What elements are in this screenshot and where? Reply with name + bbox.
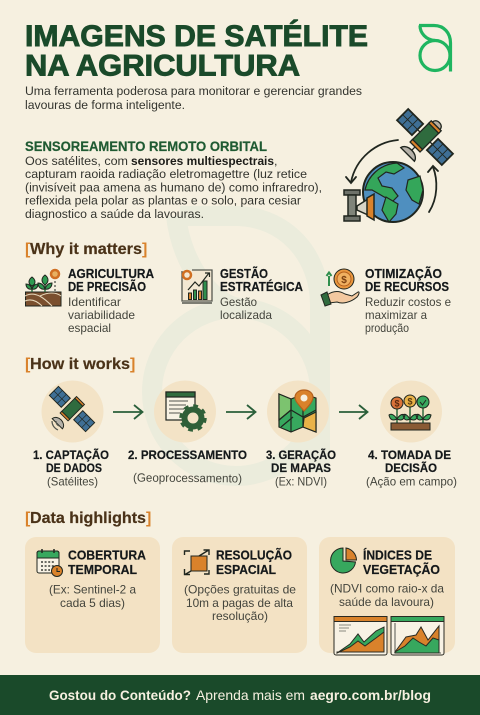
description: Identificar [68, 295, 121, 309]
label: (Satélites) [47, 474, 98, 488]
section heading: why it matters: [ [25, 241, 31, 258]
description: produção [365, 321, 409, 335]
label: 2. PROCESSAMENTO [128, 448, 247, 462]
description [330, 582, 444, 609]
description: (NDVI como raio-x da [330, 582, 444, 596]
subtitle: lavouras de forma inteligente. [25, 98, 185, 112]
step 2: processamento [128, 380, 247, 485]
icon: chart and gear [182, 270, 212, 303]
label: (Ação em campo) [366, 474, 457, 488]
icon: money plants: $ [407, 396, 413, 406]
footer: Aprenda mais em [196, 687, 305, 703]
heading: AGRICULTURA [68, 266, 155, 281]
satellite [385, 100, 462, 177]
section heading: how it works: ] [130, 356, 135, 373]
label [128, 448, 247, 485]
heading [365, 266, 449, 294]
icon: money plants: $ [394, 398, 400, 408]
text block: sensoreamento: diagnostico a saúde da lavouras. [25, 207, 204, 221]
label: (Geoprocessamento) [133, 471, 242, 485]
label: DE MAPAS [271, 461, 331, 475]
icon: plants and soil [25, 270, 61, 306]
title: NA AGRICULTURA [25, 50, 300, 82]
watermark logo [152, 216, 320, 476]
arrow 2 [226, 405, 256, 419]
heading: COBERTURA [68, 548, 147, 562]
heading: OTIMIZAÇÃO [365, 266, 442, 281]
heading: GESTÃO [220, 266, 268, 281]
section heading: why it matters: ] [142, 241, 147, 258]
description [49, 582, 136, 610]
description: Reduzir costos e [365, 295, 451, 309]
panel: cobertura temporal [25, 537, 160, 653]
orbit arrows [346, 140, 438, 212]
icon: money plants [380, 380, 442, 442]
section heading: how it works: [ [25, 356, 31, 373]
description [68, 295, 135, 335]
text block: sensoreamento: Oos satélites, com [25, 154, 128, 168]
label: DE DADOS [46, 461, 102, 475]
description: 10m a pagas de alta [186, 596, 293, 610]
section heading: data highlights: ] [146, 510, 151, 527]
description: variabilidade [68, 308, 135, 322]
label: 4. TOMADA DE [368, 448, 451, 462]
section heading: how it works: How it works [30, 356, 130, 373]
heading [220, 266, 304, 294]
description: cada 5 dias) [60, 596, 125, 610]
step 4: tomada de decisão [366, 380, 457, 488]
subtitle: Uma ferramenta poderosa para monitorar e gerenciar grandes [25, 84, 362, 98]
item: gestão estratégica [182, 266, 304, 322]
description: resolução) [212, 609, 268, 623]
panel: resolução espacial [172, 537, 307, 653]
item: otimização de recursos [321, 266, 451, 335]
description: (Ex: Sentinel-2 a [49, 582, 136, 596]
icon: map with pin [267, 380, 329, 442]
icon: resize [184, 550, 209, 574]
title [25, 19, 368, 82]
subtitle [25, 84, 362, 112]
section heading: why it matters: Why it matters [30, 241, 142, 258]
description [184, 582, 296, 623]
panel: índices de vegetação [319, 537, 455, 655]
heading [363, 548, 440, 577]
ground station [344, 190, 374, 221]
heading: VEGETAÇÃO [363, 562, 440, 577]
label: 3. GERAÇÃO [266, 447, 336, 462]
chart: orange window [334, 616, 387, 655]
footer: Gostou do Conteúdo? [49, 687, 191, 703]
heading: ÍNDICES DE [363, 548, 432, 562]
label: (Ex: NDVI) [275, 474, 327, 488]
label: DECISÃO [385, 460, 437, 475]
step 1: captação de dados [33, 380, 109, 488]
icon: window and gear [154, 380, 216, 442]
heading: ESPACIAL [216, 562, 276, 577]
description: localizada [220, 308, 272, 322]
icon: satellite [39, 380, 104, 442]
heading: RESOLUÇÃO [216, 548, 292, 562]
text block: sensoreamento: (invisíveit paa amena as humano de) como infraredro), [25, 180, 322, 194]
arrow 3 [339, 405, 368, 419]
heading [216, 548, 292, 577]
label [366, 448, 457, 488]
section heading: data highlights: [ [25, 510, 31, 527]
footer [0, 675, 480, 715]
text block: sensoreamento: capturam raoida radiação eletromagettre (luz retice [25, 167, 307, 181]
heading: TEMPORAL [68, 562, 137, 577]
item: agricultura de precisão [25, 266, 155, 335]
text block: sensoreamento: sensores multiespectrais [131, 154, 274, 168]
label: 1. CAPTAÇÃO [33, 447, 109, 462]
title: IMAGENS DE SATÉLITE [25, 19, 368, 53]
heading: DE PRECISÃO [68, 279, 146, 294]
icon: calendar and clock [37, 549, 62, 576]
description [220, 295, 272, 322]
description: (Opções gratuitas de [184, 582, 296, 596]
label [33, 447, 109, 488]
chart: green window [391, 616, 444, 655]
icon: pie chart [331, 548, 356, 573]
icon: hand with coin: $ [341, 275, 347, 286]
label [266, 447, 336, 488]
step 3: geração de mapas [266, 380, 336, 488]
description: saúde da lavoura) [339, 595, 434, 609]
heading: ESTRATÉGICA [220, 279, 304, 294]
description: espacial [68, 321, 111, 335]
earth [363, 162, 423, 222]
text block: sensoreamento: , [274, 154, 277, 168]
heading: sensoreamento remoto orbital: SENSOREAMENTO REMOTO ORBITAL [25, 139, 267, 154]
text block: sensoreamento [25, 154, 322, 221]
arrow 1 [113, 405, 142, 419]
description [365, 295, 451, 335]
heading [68, 548, 147, 577]
text block: sensoreamento: reflexida pela polar as plantas e o solo, para cesiar [25, 194, 301, 208]
heading [68, 266, 155, 294]
section heading: data highlights: Data highlights [30, 510, 146, 527]
logo [419, 26, 450, 72]
icon: satellite orbiting earth [344, 100, 462, 222]
description: maximizar a [365, 308, 427, 322]
footer: aegro.com.br/blog [310, 687, 431, 703]
description: Gestão [220, 295, 257, 309]
heading: DE RECURSOS [365, 279, 449, 294]
